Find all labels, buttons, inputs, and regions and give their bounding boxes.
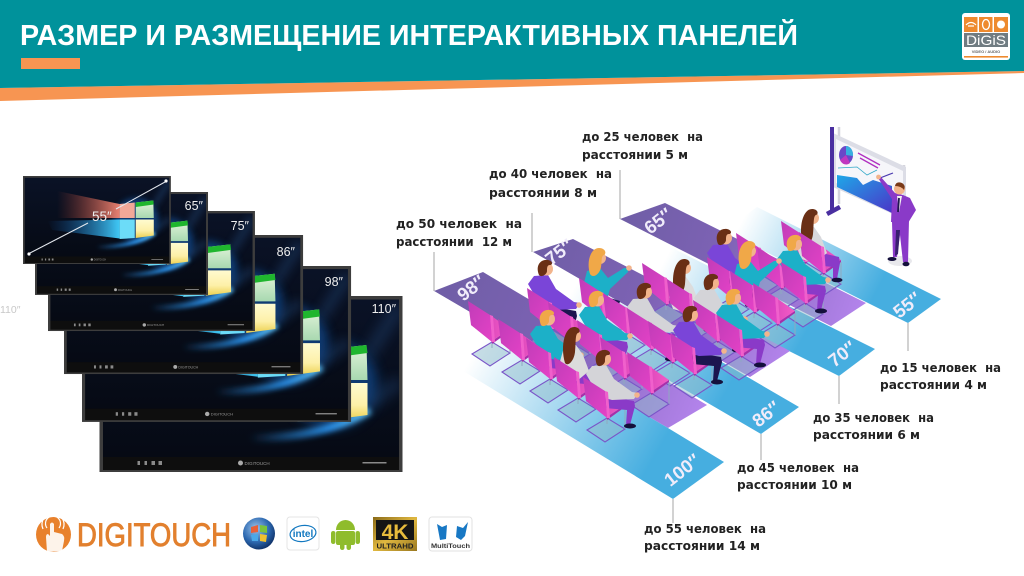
strip size labels: 86″ [748, 396, 784, 431]
DiGiS logo [962, 13, 1010, 60]
strip size labels: 100″ [660, 449, 704, 490]
icon: 4K Ultra HD: 4K [382, 521, 408, 544]
header banner [0, 0, 1024, 101]
presenter [876, 175, 916, 266]
floor strip: 65 inch [620, 203, 866, 326]
title accent bar [21, 58, 80, 69]
strip size labels: 75″ [541, 234, 577, 269]
icon: 4K Ultra HD [373, 517, 417, 551]
panel 110 inch [100, 296, 402, 472]
icon: Intel: intel [293, 529, 313, 540]
caption: 65 inch capacity: расстоянии 5 м [582, 148, 688, 162]
brand logo: Digitouch [36, 513, 231, 553]
caption: 70 inch capacity: расстоянии 6 м [813, 428, 920, 442]
whiteboard [827, 127, 906, 220]
row two [527, 260, 669, 417]
row three [579, 248, 727, 398]
caption: 75 inch capacity: расстоянии 8 м [489, 186, 597, 200]
row four [642, 259, 770, 380]
icon: MultiTouch: MultiTouch [431, 543, 470, 550]
panel 110 inch: 110″ [372, 302, 397, 316]
leader lines [434, 170, 908, 523]
floor strip: 55 inch [724, 207, 941, 323]
panel stack [23, 176, 402, 472]
caption: 55 inch capacity: расстоянии 4 м [880, 378, 987, 392]
brand logo: Digitouch: DIGITOUCH [77, 517, 231, 553]
strip size labels: 70″ [824, 336, 860, 371]
row five [707, 229, 795, 348]
panel 75 inch: 75″ [231, 219, 250, 233]
floor strip: 75 inch [533, 239, 790, 377]
row seven [781, 209, 842, 297]
seating: rows of chairs and audience [468, 209, 842, 442]
icon: MultiTouch [429, 517, 472, 551]
panel 98 inch: 98″ [325, 275, 344, 289]
caption: 86 inch capacity: до 45 человек на [737, 461, 859, 475]
faint stray size label: 110″ [0, 304, 21, 316]
caption: 100 inch capacity: расстоянии 14 м [644, 539, 760, 553]
strip size labels: 98″ [453, 270, 489, 305]
panel 98 inch [82, 266, 351, 422]
row one [468, 301, 640, 442]
icon: Windows orb [243, 518, 275, 550]
floor strip: 98 inch [434, 272, 707, 428]
icon: 4K Ultra HD: ULTRAHD [376, 542, 414, 550]
icon: Intel [287, 517, 319, 550]
panel 65 inch: 65″ [185, 199, 204, 213]
panel 55 inch [23, 176, 171, 264]
floor strip: 70 inch [573, 222, 875, 376]
caption: 98 inch capacity: расстоянии 12 м [396, 235, 512, 249]
DiGiS logo: DiGiS [966, 32, 1006, 48]
floor strip: 100 inch [434, 291, 724, 499]
title: РАЗМЕР И РАЗМЕЩЕНИЕ ИНТЕРАКТИВНЫХ ПАНЕЛЕЙ [20, 19, 798, 52]
panel 86 inch: 86″ [277, 245, 296, 259]
panel 65 inch [35, 192, 208, 295]
DiGiS logo: VIDEO / AUDIO [972, 49, 1000, 54]
caption: 75 inch capacity: до 40 человек на [489, 167, 612, 181]
row six [736, 233, 831, 327]
caption: 55 inch capacity: до 15 человек на [880, 361, 1001, 375]
caption: 70 inch capacity: до 35 человек на [813, 411, 934, 425]
strip size labels: 65″ [640, 203, 676, 238]
panel 55 inch: 55″ [92, 209, 112, 224]
panel 86 inch [64, 235, 303, 374]
caption: 65 inch capacity: до 25 человек на [582, 130, 703, 144]
strip size labels: 55″ [889, 287, 925, 322]
strip size labels [453, 203, 925, 490]
panel 75 inch [48, 211, 255, 331]
caption: 98 inch capacity: до 50 человек на [396, 217, 522, 231]
caption: 86 inch capacity: расстоянии 10 м [737, 478, 852, 492]
icon: Android [331, 520, 360, 550]
floor strip: 86 inch [483, 252, 799, 434]
caption: 100 inch capacity: до 55 человек на [644, 522, 766, 536]
